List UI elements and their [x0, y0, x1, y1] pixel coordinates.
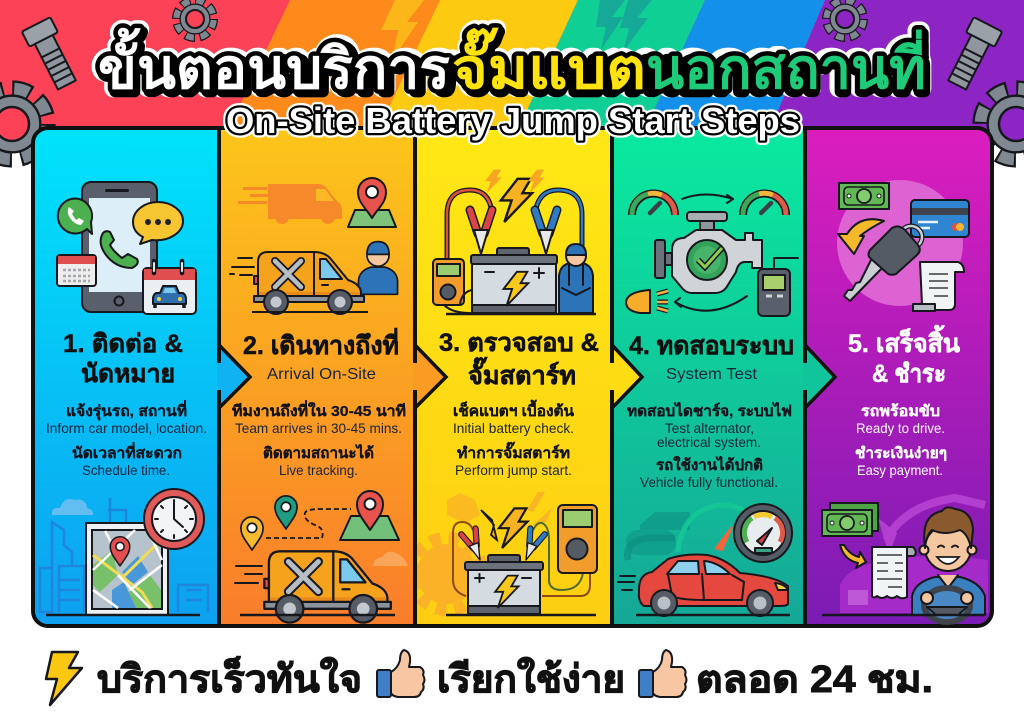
- icon: thumbs up two: [639, 650, 686, 697]
- arrow: step 3 to 4: [610, 345, 642, 408]
- icon: gear left: [0, 89, 47, 159]
- rainbow header background: [0, 0, 1024, 130]
- title: English subtitle: On-Site Battery Jump Start Steps: [226, 100, 800, 141]
- title: Thai headline: นอกสถานที่: [646, 29, 926, 100]
- icon: header lightning orange: [381, 0, 424, 60]
- text: step 3 details: ทำการจั๊มสตาร์ท: [457, 441, 570, 462]
- text: step 1 details: Schedule time.: [82, 462, 170, 478]
- text: open 24 hours: ตลอด 24 ชม.: [696, 659, 933, 701]
- panel: step 3 check and jump: [411, 170, 599, 615]
- icon: bolt left: [22, 17, 81, 92]
- panel: step 4 system test: [618, 193, 798, 616]
- text: step 2 details: Team arrives in 30-45 mins.: [235, 420, 402, 436]
- text: step 4 details: [627, 401, 792, 490]
- text: step 4 details: electrical system.: [657, 434, 761, 450]
- text: step 3 details: Perform jump start.: [455, 462, 572, 478]
- text: step 1 details: แจ้งรุ่นรถ, สถานที่: [66, 400, 187, 421]
- heading: step 4: 4. ทดสอบระบบ: [629, 332, 794, 360]
- heading: step 1: นัดหมาย: [81, 360, 175, 388]
- title: English subtitle: On-Site Battery Jump Start Steps: [226, 100, 800, 141]
- footer slogan: [46, 650, 933, 705]
- arrow: step 4 to 5: [803, 345, 835, 408]
- heading: step 1: 1. ติดต่อ &: [63, 330, 183, 358]
- text: step 2 details: [232, 400, 406, 478]
- text: step 3 details: [453, 399, 575, 478]
- icon: bolt right: [943, 17, 1002, 92]
- panel: step 2 arrival: [230, 178, 408, 623]
- text: step 3 details: เช็คแบตฯ เบื้องต้น: [453, 399, 575, 420]
- icon: battery with clamps and multimeter: [411, 492, 597, 615]
- text: fast service: บริการเร็วทันใจ: [97, 656, 362, 701]
- icon: gear hole top left: [186, 10, 204, 28]
- title: Thai headline: ขั้นตอนบริการจั๊มแบตนอกสถานที่: [100, 30, 928, 103]
- heading: step 3: 3. ตรวจสอบ &: [439, 329, 599, 357]
- icon: speeding van and map pin: [230, 178, 398, 314]
- icon: lightning bolt: [46, 652, 82, 705]
- icon: phone with messages and calendar: [57, 182, 196, 314]
- text: step 4 details: ทดสอบไดชาร์จ, ระบบไฟ: [627, 401, 792, 420]
- icon: gear right: [981, 89, 1024, 159]
- icon: header lightning teal: [596, 0, 652, 52]
- text: step 5 details: ชำระเงินง่ายๆ: [855, 444, 947, 462]
- text: step 1 details: นัดเวลาที่สะดวก: [72, 442, 182, 462]
- icon: gear hole left: [0, 107, 29, 141]
- text: step 4 details: Test alternator,: [665, 420, 754, 436]
- text: step 5 details: [855, 403, 947, 478]
- text: step 1 details: Inform car model, location.: [46, 420, 207, 436]
- text: step 5 details: Easy payment.: [857, 462, 943, 478]
- heading: step 3: [439, 329, 599, 390]
- icon: key, card, money and receipt: [837, 180, 969, 311]
- steps board: [33, 128, 992, 626]
- arrow: step 1 to 2: [217, 345, 250, 408]
- icon: gear hole top right: [836, 10, 854, 28]
- icon: gear top right: [826, 0, 864, 38]
- icon: thumbs up one: [377, 650, 424, 697]
- text: step 2 details: ติดตามสถานะได้: [263, 443, 374, 462]
- text: step 2 details: Live tracking.: [279, 462, 358, 478]
- panel: step 5 finish and payment: [822, 180, 988, 622]
- icon: red car with speedometer: [618, 504, 792, 616]
- text: step 4 details: รถใช้งานได้ปกติ: [656, 455, 763, 474]
- icon: battery, jumper cables, meter and mechanic: [433, 170, 596, 314]
- heading: step 2: 2. เดินทางถึงที่: [243, 328, 399, 360]
- icon: engine check with gauges, tester and headlamp: [626, 193, 798, 316]
- icon: route pins and van: [235, 491, 408, 623]
- heading: step 5: & ชำระ: [872, 360, 946, 388]
- heading: step 5: [848, 324, 960, 388]
- icon: happy driver with receipt and money: [822, 498, 988, 622]
- title: Thai headline: จั๊มแบต: [452, 27, 646, 100]
- heading: step 3: จั๊มสตาร์ท: [468, 356, 576, 390]
- icon: gear hole right: [999, 107, 1024, 141]
- title: Thai headline: ขั้นตอนบริการจั๊มแบตนอกสถานที่: [98, 27, 926, 100]
- text: step 4 details: Vehicle fully functional.: [640, 474, 778, 490]
- icon: gear top left: [176, 0, 214, 38]
- heading: step 5: 5. เสร็จสิ้น: [848, 324, 960, 358]
- panel: step 1 contact: [40, 182, 208, 615]
- heading: step 1: [63, 330, 183, 388]
- arrow: step 2 to 3: [413, 345, 446, 408]
- text: step 2 details: ทีมงานถึงที่ใน 30-45 นาที: [232, 400, 406, 420]
- title: Thai headline: ขั้นตอนบริการ: [98, 28, 450, 100]
- text: step 5 details: รถพร้อมขับ: [861, 403, 940, 420]
- text: easy to call: เรียกใช้ง่าย: [437, 657, 625, 701]
- subtitle: step 4: System Test: [666, 366, 758, 383]
- text: step 3 details: Initial battery check.: [453, 420, 574, 436]
- icon: city map and clock: [40, 489, 208, 615]
- text: step 5 details: Ready to drive.: [856, 420, 945, 436]
- subtitle: step 2: Arrival On-Site: [267, 366, 376, 383]
- text: step 1 details: [46, 400, 207, 478]
